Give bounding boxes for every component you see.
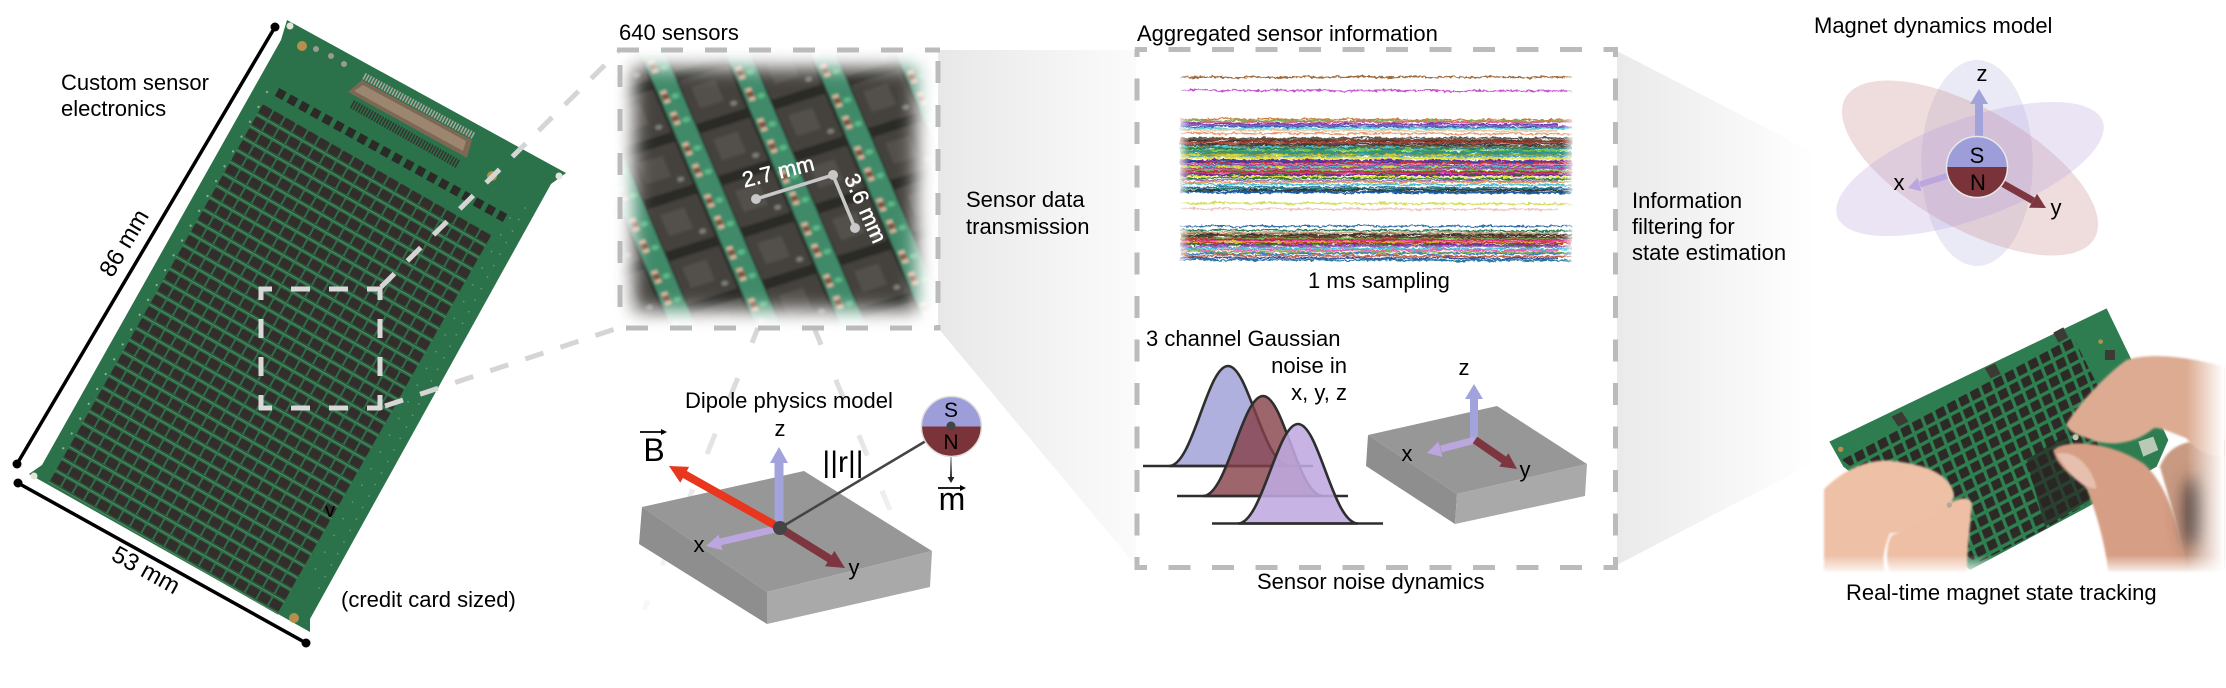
arrow: x: [1908, 175, 1950, 191]
zoom guide lines to dipole model: [644, 328, 890, 610]
panel: custom sensor board photo: [29, 20, 566, 632]
mounting holes: [30, 22, 562, 623]
magnet: N: [1970, 170, 1986, 195]
label: information filtering: filtering for: [1632, 214, 1735, 239]
funnel: information filtering: [1617, 51, 1813, 565]
pitch annotations: [740, 150, 892, 247]
magnet: [1946, 136, 2008, 198]
photo fade right: [2187, 350, 2224, 577]
moment arrow: [948, 457, 954, 483]
axis labels: x: [694, 532, 704, 557]
pcb in hand: [1829, 308, 2168, 570]
axis labels: y: [1520, 457, 1530, 482]
hand left: [1824, 461, 1972, 572]
pitch annotations: 3.6 mm: [839, 170, 892, 247]
hand right: thumb: [2053, 443, 2188, 572]
center dot: [773, 521, 787, 535]
uncertainty ellipses: [1816, 46, 2124, 290]
hand right: palm: [2160, 440, 2223, 572]
label: credit card sized: (credit card sized): [341, 587, 516, 612]
heading: 640 sensors: [619, 20, 739, 45]
label: m vector: m: [939, 481, 965, 517]
panel: hand-held tracking photo: [1820, 308, 2226, 577]
arrow: y: [780, 528, 845, 568]
magnet beads: [1947, 434, 2079, 508]
heading: Dipole physics model: [685, 388, 893, 413]
magnet: S: [1970, 143, 1984, 168]
chips on board: [1838, 327, 2158, 457]
arrow: z: [770, 447, 788, 528]
sensor block with axes: [1366, 355, 1587, 524]
pcb outline: [29, 20, 566, 632]
close-up photo: [618, 52, 932, 326]
component row: [277, 92, 505, 218]
arrow: z: [1970, 89, 1988, 137]
axis labels: z: [1976, 61, 1988, 86]
dashed frame: [617, 48, 940, 330]
dimension: 86 mm: 86 mm: [94, 205, 155, 282]
axis labels: x: [1402, 441, 1412, 466]
panel: dipole physics model: [639, 388, 981, 624]
panel: magnet dynamics model: [1814, 13, 2124, 290]
dimension: 86 mm: [12, 22, 280, 468]
funnel: sensor data transmission: [938, 50, 1136, 566]
arrow: x: [706, 528, 780, 550]
heading: Magnet dynamics model: [1814, 13, 2052, 38]
axis labels: x: [1894, 170, 1904, 195]
axis labels: z: [1458, 355, 1470, 380]
zoom box on board: [259, 287, 381, 410]
dashed frame: [1135, 49, 1618, 570]
label: custom sensor electronics: Custom sensor: [61, 70, 209, 95]
hand right: index finger: [2067, 356, 2223, 457]
sensor array: [48, 103, 493, 615]
axis labels: y: [2050, 195, 2062, 220]
distance line r: [780, 426, 951, 528]
chart: sensor traces: [1176, 70, 1576, 266]
label: sensor data transmission: Sensor data: [966, 187, 1085, 212]
chart: gaussian curves: [1143, 366, 1383, 524]
dimension: 53 mm: [14, 478, 310, 648]
pitch annotations: 2.7 mm: [740, 150, 817, 192]
label: gaussian noise: 3 channel Gaussian: [1146, 326, 1340, 351]
label: custom sensor electronics: electronics: [61, 96, 166, 121]
magnet: S: [944, 399, 958, 422]
axis labels: [1402, 355, 1530, 482]
axis labels: z: [774, 416, 786, 441]
shaded finger crease: [2183, 477, 2203, 550]
label: real-time tracking: Real-time magnet state tracking: [1846, 580, 2157, 605]
axis labels: y: [848, 555, 860, 580]
magnet: [921, 396, 981, 456]
label: gaussian noise: noise in: [1271, 353, 1347, 378]
arrow: B field: [669, 466, 780, 528]
shadowed sensors: [2027, 433, 2090, 527]
label: B vector: B: [643, 432, 665, 468]
sensor block: [639, 471, 932, 624]
label: sensor noise dynamics: Sensor noise dynamics: [1257, 569, 1484, 594]
label: information filtering: state estimation: [1632, 240, 1786, 265]
label: sensor data transmission: transmission: [966, 214, 1089, 239]
axis labels: [1894, 61, 2062, 220]
arrow: y: [1475, 440, 1517, 469]
panel: 640 sensors close-up: [610, 20, 940, 335]
stray mark: v: [325, 500, 335, 522]
board edge pads: [60, 92, 525, 590]
dimension: 53 mm: 53 mm: [107, 541, 184, 600]
axis labels: [694, 416, 860, 580]
label: information filtering: Information: [1632, 188, 1742, 213]
heading: Aggregated sensor information: [1137, 21, 1438, 46]
sensor array: [1840, 337, 2103, 563]
arrow: x: [1427, 440, 1475, 457]
arrow: z: [1465, 384, 1483, 440]
label: r norm: ||r||: [822, 446, 864, 479]
zoom guide lines from board to sensor box: [381, 52, 618, 406]
label: gaussian noise: x, y, z: [1291, 380, 1347, 405]
magnet: N: [943, 431, 959, 454]
arrow: y: [2000, 182, 2046, 208]
photo fade bottom: [1820, 555, 2226, 575]
connector: [348, 76, 474, 164]
panel: aggregated sensor information: [1135, 21, 1618, 594]
label: sampling: 1 ms sampling: [1308, 268, 1450, 293]
